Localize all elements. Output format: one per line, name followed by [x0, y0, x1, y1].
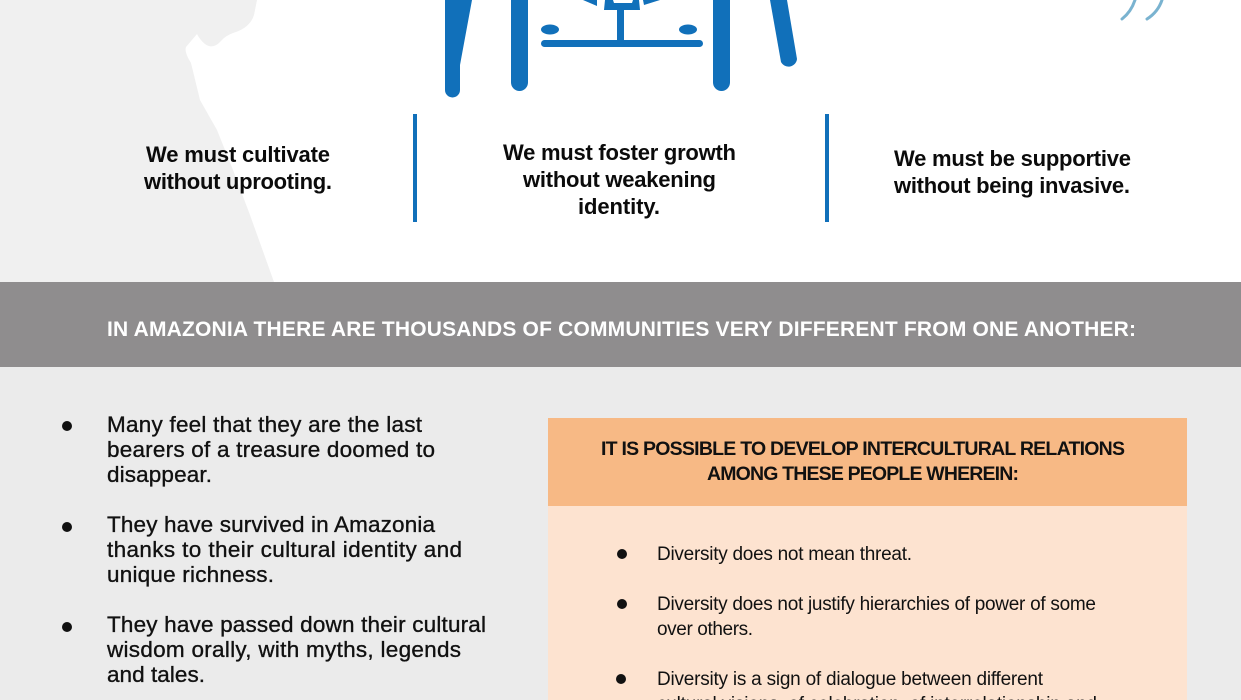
- bullet item 3: and tales.: [107, 662, 205, 687]
- bullet item 2: unique richness.: [107, 562, 274, 587]
- text: be supportive: We must be supportive: [894, 146, 1131, 171]
- panel heading: [548, 418, 1187, 506]
- text: foster growth: We must foster growth: [503, 140, 736, 165]
- lower background: [0, 367, 1241, 700]
- panel body: Diversity is a sign of dialogue between different: [657, 669, 1044, 690]
- bullet item 2: [62, 512, 462, 587]
- left bullet list: [62, 412, 486, 687]
- bullet item 1: disappear.: [107, 462, 212, 487]
- banner: grey band: IN AMAZONIA THERE ARE THOUSANDS OF COMMUNITIES VERY DIFFERENT FROM ONE ANOTHER:: [107, 318, 1136, 341]
- text: cultivate without uprooting: without uprooting.: [143, 169, 332, 194]
- panel body: [548, 506, 1187, 700]
- panel body: over others.: [657, 619, 753, 640]
- text: be supportive: without being invasive.: [893, 173, 1130, 198]
- panel body: Diversity does not mean threat.: [657, 544, 912, 565]
- divider left: [413, 114, 417, 222]
- bullet item 1: Many feel that they are the last: [107, 412, 423, 437]
- text: foster growth: identity.: [578, 194, 660, 219]
- text: cultivate without uprooting: We must cultivate: [146, 142, 330, 167]
- text: foster growth: without weakening: [522, 167, 716, 192]
- panel body: Diversity does not justify hierarchies of power of some: [657, 594, 1096, 615]
- background silhouette: [0, 0, 274, 282]
- bullet item 1: bearers of a treasure doomed to: [107, 437, 435, 462]
- text: cultivate without uprooting: [143, 142, 332, 194]
- text: be supportive: [893, 146, 1131, 198]
- bullet item 1: [62, 412, 435, 487]
- banner: grey band: [0, 282, 1241, 367]
- panel: intercultural relations: [548, 418, 1187, 700]
- icon: blue figure with central emblem: [445, 0, 797, 98]
- bullet item 2: thanks to their cultural identity and: [107, 537, 462, 562]
- panel heading: IT IS POSSIBLE TO DEVELOP INTERCULTURAL RELATIONS: [601, 438, 1125, 460]
- icon: light blue swirls: [1122, 0, 1162, 19]
- panel heading: AMONG THESE PEOPLE WHEREIN:: [707, 463, 1019, 485]
- divider right: [825, 114, 829, 222]
- bullet item 2: They have survived in Amazonia: [107, 512, 435, 537]
- bullet item 3: They have passed down their cultural: [107, 612, 486, 637]
- bullet item 3: wisdom orally, with myths, legends: [106, 637, 461, 662]
- bullet item 3: [62, 612, 486, 687]
- text: foster growth: [503, 140, 736, 219]
